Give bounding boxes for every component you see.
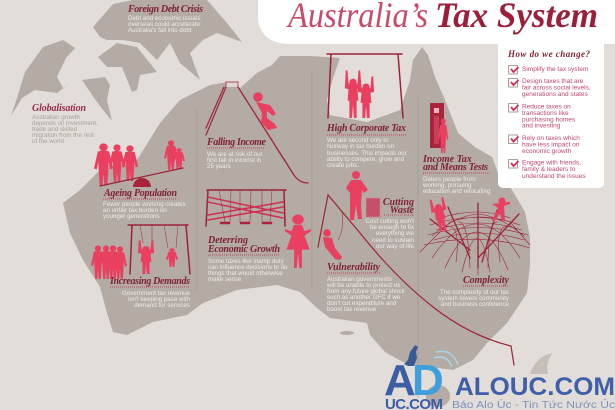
vulnerability: Australian governments: [327, 276, 392, 283]
checklist text: Engage with friends,: [522, 160, 581, 166]
world map: [11, 0, 242, 121]
globalisation: [32, 103, 98, 145]
high corporate tax: We are second only to: [327, 137, 389, 144]
complexity net illustration: [420, 197, 530, 275]
cutting waste: [365, 197, 415, 250]
checklist text: Reduce taxes on: [522, 104, 571, 110]
falling income: Falling Income: [206, 137, 267, 148]
map of Australia: [63, 47, 530, 370]
globalisation: trade and skilled: [32, 126, 78, 133]
cutting waste: be enough to fix: [370, 224, 415, 231]
checklist text: [522, 66, 591, 180]
high corporate tax: create jobs.: [327, 162, 359, 169]
foreign debt crisis: Australia's fall into debt: [128, 27, 192, 34]
increasing demands: Increasing Demands: [109, 276, 190, 287]
high corporate tax: Norway in tax burden on: [327, 143, 395, 150]
cutting waste: Cost cutting won't: [365, 218, 414, 225]
globalisation: depends on investment,: [32, 120, 98, 127]
logo letters AD: [384, 356, 444, 410]
vulnerability: don't cut expenditure and: [327, 300, 397, 307]
deterring economic growth: [207, 235, 288, 283]
complexity: Complexity: [463, 275, 510, 286]
panel: how do we change: How do we change?: [507, 49, 590, 59]
cutting waste: our way of life: [376, 243, 415, 250]
falling income: 25 years: [207, 163, 231, 170]
slide illustration: [206, 82, 308, 183]
door with figure: [430, 103, 448, 153]
foreign debt crisis: Foreign Debt Crisis: [127, 4, 203, 15]
ageing population: younger generations: [103, 213, 159, 220]
checklist text: generations and states: [522, 91, 589, 98]
income tax and means tests: Deters people from: [423, 176, 476, 183]
ageing population: Fewer people working creates: [103, 201, 186, 208]
vulnerability: such as another GFC if we: [327, 294, 401, 301]
income tax and means tests: [422, 154, 491, 195]
icon: signal arcs: [434, 351, 458, 367]
checklist text: family & leaders to: [522, 166, 576, 173]
checklist text: and investing: [522, 122, 561, 130]
globalisation: Globalisation: [32, 103, 86, 114]
checklist text: transactions like: [522, 110, 569, 117]
income tax and means tests: working, pursuing: [422, 182, 472, 189]
foreign debt crisis: [127, 4, 203, 34]
complexity: system lowers community: [438, 295, 510, 302]
ageing population: Ageing Population: [103, 188, 177, 199]
climbing net illustration: [206, 190, 286, 226]
checklist text: understand the issues: [522, 173, 586, 180]
watermark logo: [384, 345, 615, 410]
cutting waste: need to sustain: [372, 237, 415, 244]
vulnerability: Vulnerability: [327, 262, 381, 273]
title panel: [258, 0, 615, 188]
checklist text: Design taxes that are: [522, 78, 584, 85]
checklist boxes: [508, 66, 518, 168]
cutting waste: everything we: [376, 230, 415, 237]
title: [286, 0, 598, 35]
high corporate tax: ability to compete, grow and: [327, 156, 405, 163]
logo wordmark: ALOUC.COM: [455, 373, 615, 401]
vulnerability: [326, 262, 406, 313]
falling income: [206, 137, 267, 170]
ageing population: an unfair tax burden on: [103, 207, 167, 214]
income tax and means tests: education and relocating: [423, 188, 491, 195]
vulnerability: from any future global shock: [327, 288, 406, 295]
checklist text: purchasing homes: [522, 116, 576, 124]
ageing population illustration: [94, 140, 185, 187]
vulnerability swing illustration: [318, 195, 514, 365]
vulnerability: boost tax revenue: [327, 306, 377, 313]
deterring economic growth: Economic Growth: [207, 244, 280, 255]
deterring economic growth: Deterring: [207, 235, 248, 246]
income tax and means tests: and Means Tests: [423, 162, 488, 173]
man with waste basket: [346, 171, 380, 220]
deterring economic growth: can influence decisions to do: [208, 264, 288, 271]
logo letters AD: D: [412, 356, 444, 405]
panel: how do we change: [507, 49, 591, 180]
region dividers: [197, 72, 418, 398]
vulnerability: will be unable to protect us: [326, 282, 400, 289]
falling income: first fall in income in: [207, 157, 262, 164]
income tax and means tests: Income Tax: [422, 154, 472, 165]
deterring economic growth: make sense: [208, 276, 242, 283]
deterring economic growth: Some taxes like stamp duty: [208, 258, 285, 265]
increasing demands illustration: [91, 225, 190, 279]
cutting waste: Cutting: [383, 197, 414, 208]
globalisation: of the world: [32, 138, 65, 145]
girl figure: [285, 215, 311, 268]
globalisation: Australian growth: [32, 114, 80, 121]
icon: kangaroo: [404, 345, 418, 366]
logo letters AD: A: [384, 356, 416, 405]
checklist text: Rely on taxes which: [522, 135, 580, 142]
checklist text: have less impact on: [522, 142, 580, 148]
high corporate tax: [326, 123, 407, 169]
increasing demands: Government tax revenue: [122, 290, 191, 297]
falling income: We are at risk of our: [207, 151, 263, 158]
Tasmania and shark fin: [340, 331, 553, 407]
foreign debt crisis: Debt and economic issues: [128, 15, 201, 22]
foreign debt crisis: overseas could accelerate: [128, 21, 200, 28]
increasing demands: [109, 276, 191, 309]
deterring economic growth: things that would otherwise: [208, 270, 283, 277]
complexity: The complexity of our tax: [440, 289, 510, 296]
ageing population: [103, 188, 186, 220]
high corporate tax: businesses. This impacts our: [327, 150, 407, 157]
complexity: and business confidence: [441, 301, 510, 308]
high corporate swing illustration: [327, 54, 412, 122]
increasing demands: isn't keeping pace with: [128, 296, 191, 303]
complexity: [438, 275, 510, 308]
checklist text: economic growth: [522, 148, 572, 155]
checklist text: Simplify the tax system: [522, 66, 588, 73]
high corporate tax: High Corporate Tax: [326, 123, 406, 134]
checklist text: fair across social levels,: [522, 84, 591, 92]
cutting waste: Waste: [390, 205, 415, 216]
globalisation: migration from the rest: [32, 132, 94, 139]
increasing demands: demand for services: [134, 302, 190, 309]
